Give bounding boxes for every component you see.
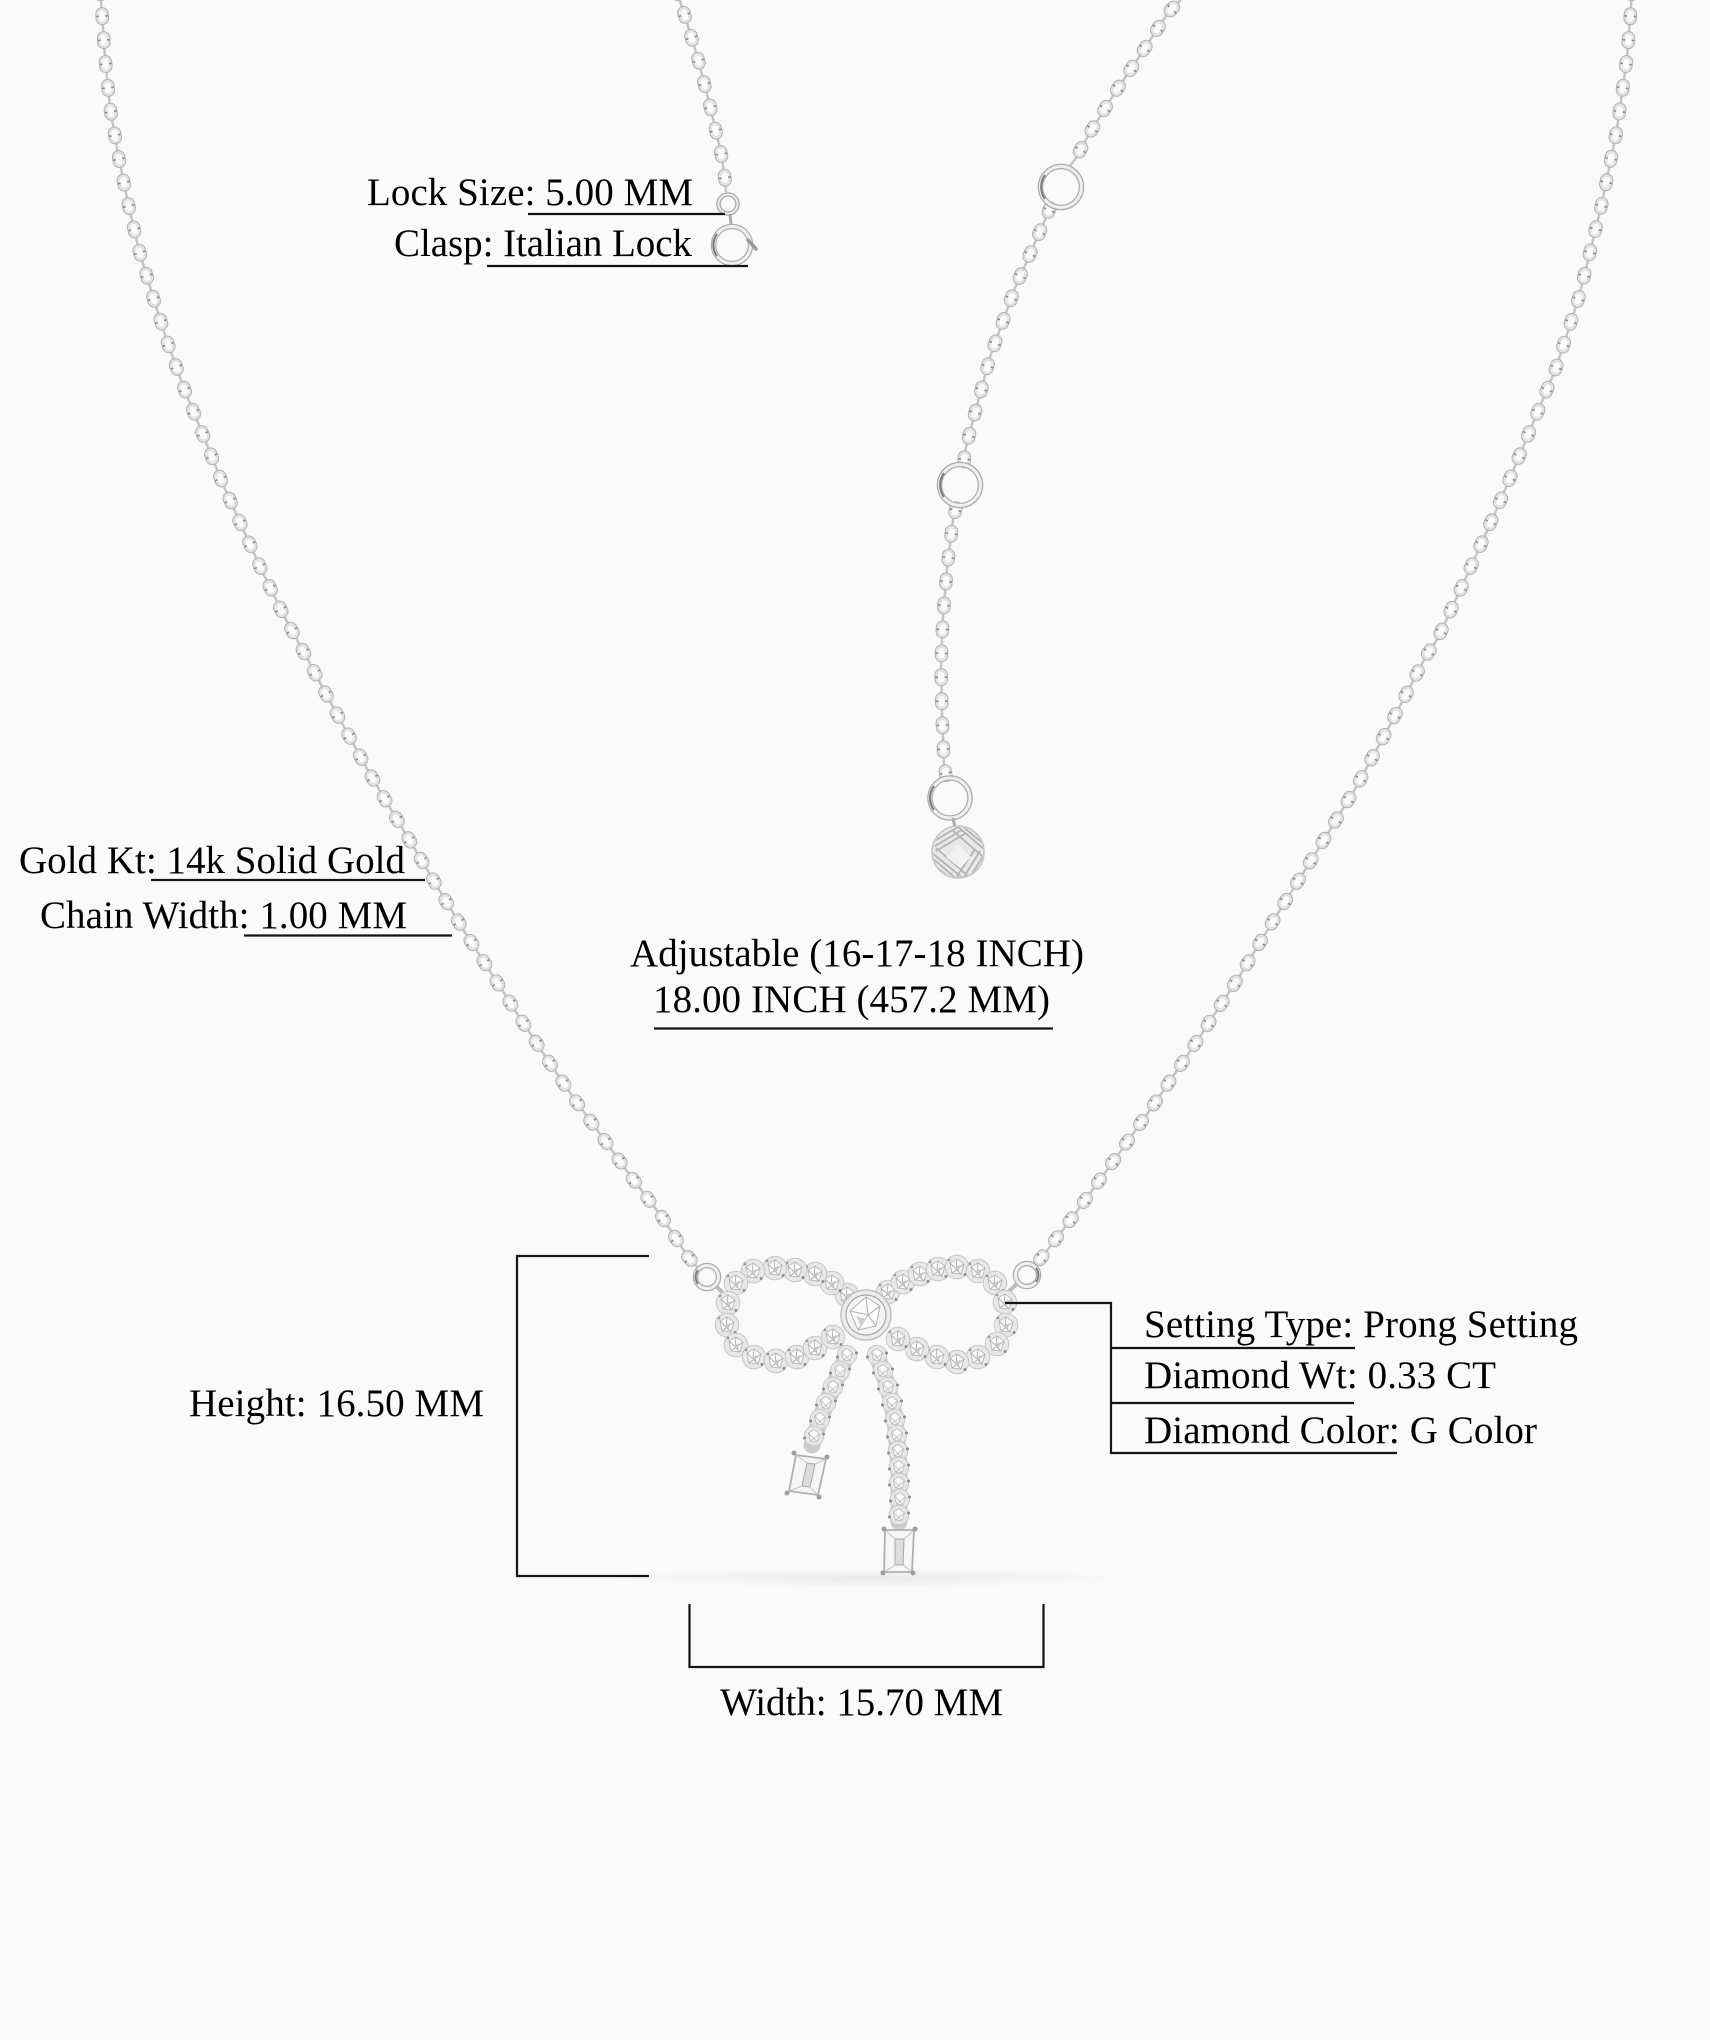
icon: extension ring 1 [1040,166,1082,208]
necklace right chain [1032,0,1632,1268]
icon: end charm disc [932,818,985,880]
bow left tail [803,1345,858,1446]
icon: right jump ring [1008,1264,1038,1292]
icon: spring ring clasp [713,214,756,264]
clasp side chain [676,0,726,192]
left baguette stone [784,1450,830,1500]
bow left loop [715,1256,859,1373]
extension chain [941,0,1190,776]
dimension: width [690,1604,1044,1724]
bow right loop [876,1255,1018,1374]
dimension: height: Height: 16.50 MM [189,1382,484,1425]
bow center stone [841,1290,891,1340]
callout: stone specifications [1005,1303,1578,1453]
callout: clasp: Clasp: Italian Lock [394,222,692,265]
bow pendant [715,1255,1018,1576]
callout: lock size: Lock Size: 5.00 MM [367,171,693,214]
callout: necklace length: Adjustable (16-17-18 INCH) [630,932,1084,975]
dimension: height [189,1256,649,1576]
icon: extension ring 3 [930,778,970,818]
callout: chain width: Chain Width: 1.00 MM [40,894,407,937]
bow right tail [866,1345,911,1525]
callout: necklace length [630,932,1084,1028]
necklace left chain [100,0,700,1270]
setting type: Setting Type: Prong Setting [1144,1303,1578,1346]
diamond color: Diamond Color: G Color [1144,1409,1537,1452]
callout: necklace length: 18.00 INCH (457.2 MM) [653,978,1050,1021]
right baguette stone [880,1526,918,1576]
diamond weight: Diamond Wt: 0.33 CT [1144,1354,1496,1397]
icon: small clasp ring [718,194,738,214]
bow tail backing [812,1355,899,1522]
icon: left jump ring [696,1266,724,1294]
dimension: width: Width: 15.70 MM [720,1681,1003,1724]
callout: gold karat: Gold Kt: 14k Solid Gold [19,839,406,882]
icon: extension ring 2 [940,464,980,506]
floor shadow [610,1568,1130,1588]
